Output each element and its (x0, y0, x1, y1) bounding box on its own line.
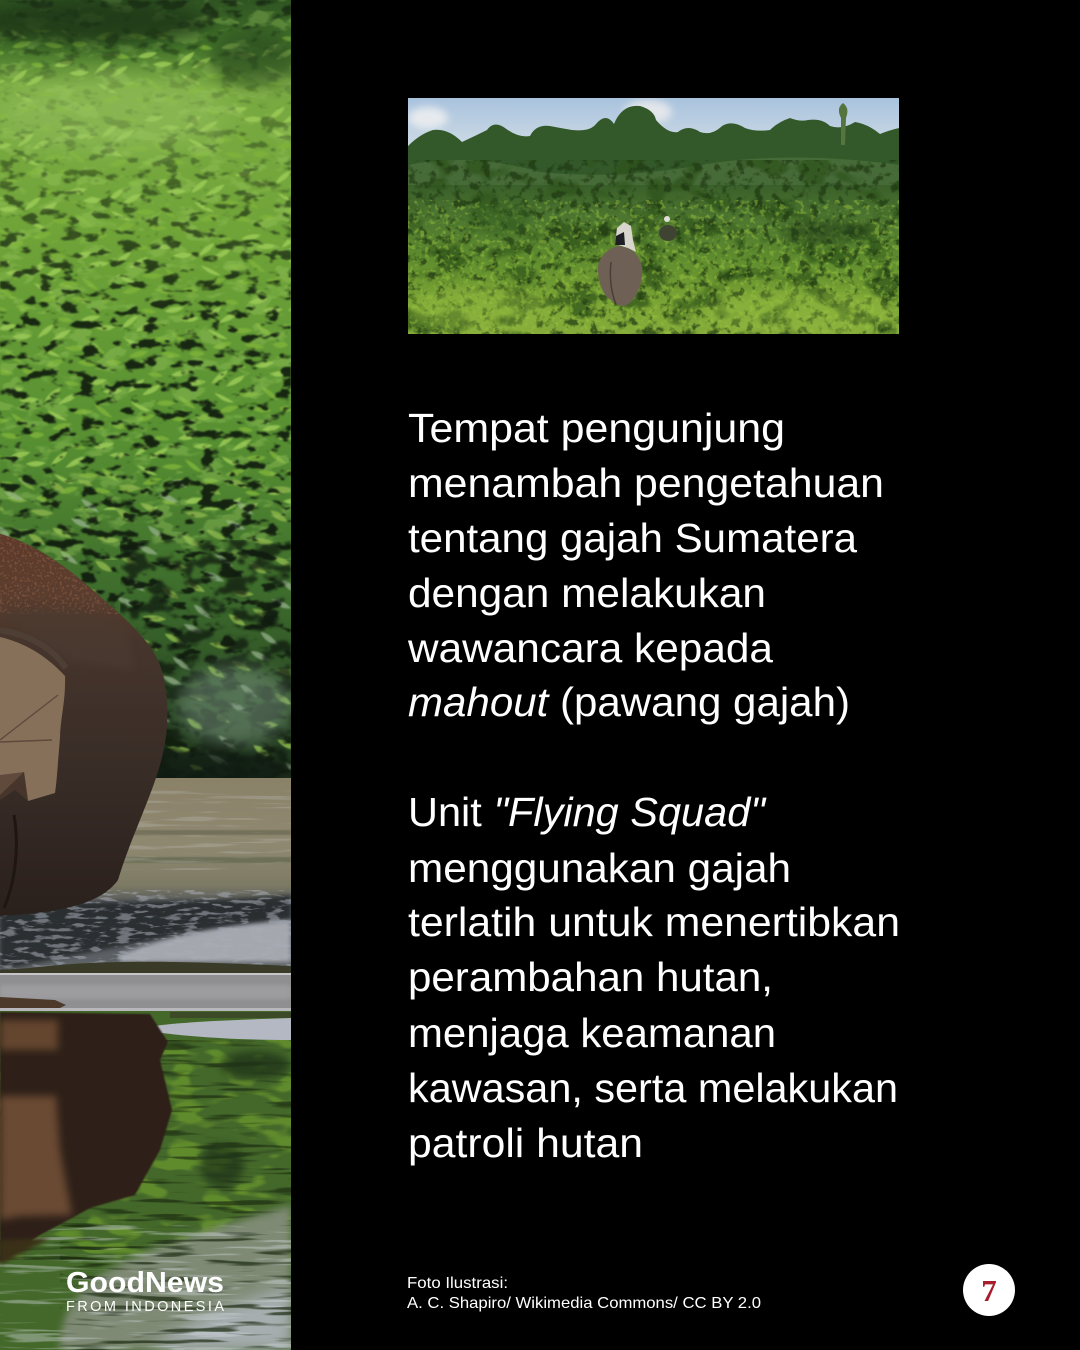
photo: elephant patrol in the forest (408, 98, 899, 334)
logo: GoodNews from Indonesia: FROM INDONESIA (66, 1299, 224, 1315)
page number badge: 7 (981, 1273, 997, 1308)
elephant ear (0, 637, 65, 801)
body text: paragraph 1: Tempat pengunjung (408, 405, 785, 451)
foliage backdrop (0, 0, 300, 800)
photo credit: Foto Ilustrasi: (407, 1275, 508, 1292)
logo: GoodNews from Indonesia: GoodNews (66, 1267, 224, 1299)
body text: paragraph 2 (408, 789, 900, 1166)
body text: paragraph 1: wawancara kepada (407, 625, 773, 671)
page number badge (963, 1264, 1015, 1316)
main elephant with riders (598, 222, 642, 306)
second elephant with rider (659, 216, 677, 241)
logo: GoodNews from Indonesia (67, 1271, 224, 1311)
field (408, 160, 899, 334)
elephant body (0, 534, 168, 916)
body text: paragraph 2: menggunakan gajah (408, 845, 791, 891)
body text: paragraph 1: mahout (pawang gajah) (408, 679, 850, 725)
body text: paragraph 2: perambahan hutan, (408, 954, 773, 1000)
body text: paragraph 2: patroli hutan (408, 1120, 643, 1166)
body text: paragraph 2: terlatih untuk menertibkan (408, 899, 900, 945)
body text: paragraph 2: menjaga keamanan (408, 1010, 776, 1056)
photo credit (407, 1275, 761, 1312)
sky (408, 98, 899, 146)
treeline (408, 103, 899, 190)
river water (0, 778, 291, 1350)
photo credit: A. C. Shapiro/ Wikimedia Commons/ CC BY 2.0 (407, 1295, 761, 1312)
body text: paragraph 2: kawasan, serta melakukan (408, 1065, 898, 1111)
body text: paragraph 2: Unit "Flying Squad" (408, 789, 767, 835)
body text: paragraph 1 (407, 405, 884, 725)
elephant reflection (0, 1012, 172, 1265)
body text: paragraph 1: menambah pengetahuan (408, 460, 884, 506)
body text: paragraph 1: dengan melakukan (408, 570, 766, 616)
panel: left elephant photo (0, 0, 300, 1350)
body text: paragraph 1: tentang gajah Sumatera (408, 515, 857, 561)
